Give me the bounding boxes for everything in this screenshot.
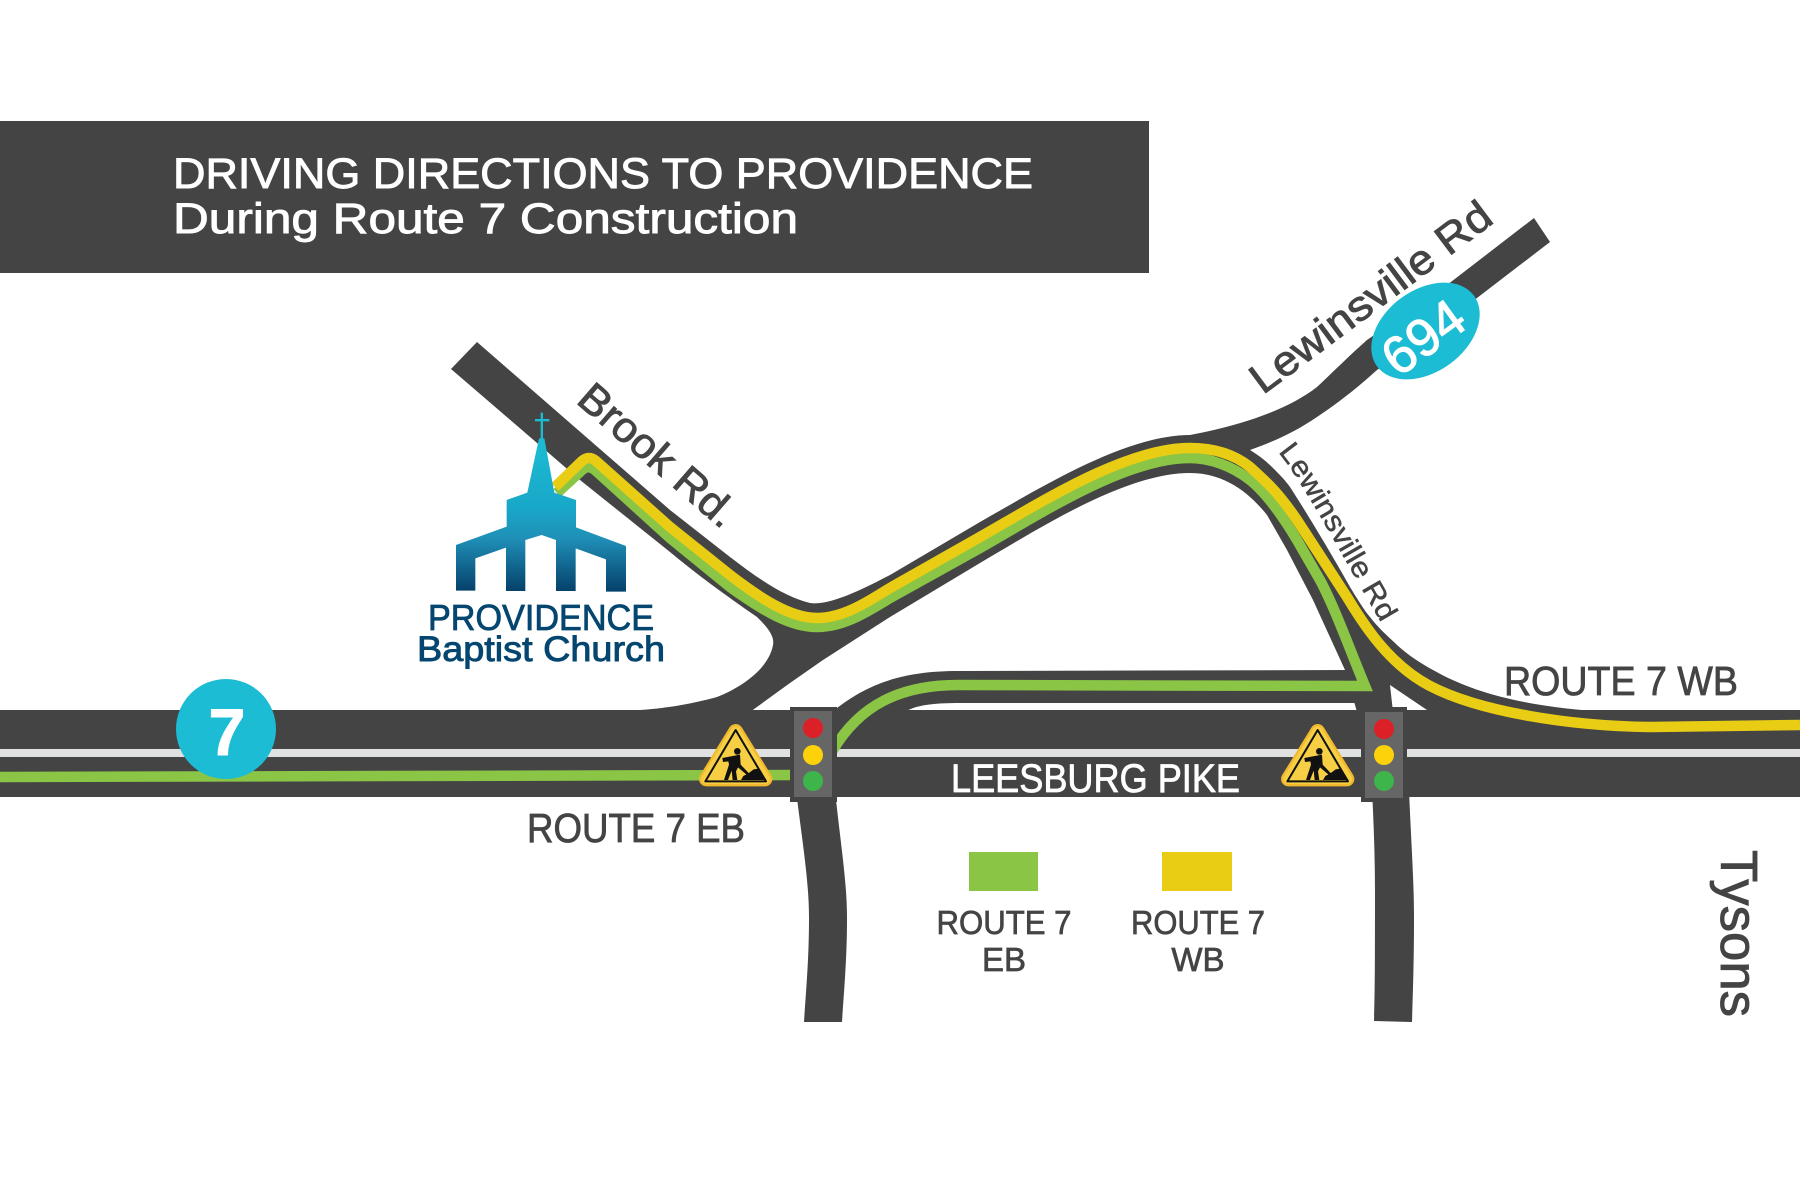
- median line: [0, 749, 1800, 757]
- road: south leg left: [796, 790, 847, 1022]
- label: Brook Rd: Brook Rd.: [569, 373, 747, 537]
- Route 694 shield: 694: [1371, 288, 1477, 388]
- church logo: [417, 413, 665, 669]
- icon: church: [456, 413, 626, 592]
- road: service road: [832, 670, 1362, 712]
- label: Tysons: Tysons: [1709, 850, 1767, 1017]
- legend: [936, 852, 1265, 978]
- legend label: WB: WB: [1171, 941, 1225, 978]
- church subtitle: Baptist Church: [417, 630, 665, 669]
- label: Leesburg Pike: LEESBURG PIKE: [951, 757, 1240, 801]
- label: Route 7 EB: ROUTE 7 EB: [527, 805, 745, 851]
- icon: construction sign right: [1287, 730, 1348, 781]
- title line 1: DRIVING DIRECTIONS TO PROVIDENCE: [173, 150, 1033, 198]
- legend swatch: EB: [969, 852, 1038, 891]
- label: Lewinsville Rd lower: Lewinsville Rd: [1279, 441, 1399, 622]
- road network: [0, 218, 1800, 1022]
- church name: PROVIDENCE: [428, 597, 654, 638]
- route: Route 7 WB yellow: [555, 448, 1800, 727]
- Route 7 shield: 7: [209, 695, 245, 769]
- legend swatch: WB: [1162, 852, 1232, 891]
- Route 694 shield: [1353, 263, 1498, 399]
- legend label: EB: EB: [982, 941, 1026, 978]
- icon: construction sign left: [705, 730, 766, 781]
- legend label: EB: ROUTE 7: [936, 904, 1072, 941]
- Route 7 shield: [176, 679, 276, 779]
- title banner: [0, 121, 1149, 273]
- traffic light right: [1361, 707, 1407, 802]
- traffic light left: [790, 707, 837, 802]
- legend label: WB: ROUTE 7: [1131, 904, 1265, 941]
- road: Brook Rd, Lewinsville Rd and Route 7 WB ramp: [451, 218, 1610, 712]
- route: Route 7 EB green: [0, 458, 1365, 777]
- title line 2: During Route 7 Construction: [173, 195, 798, 243]
- label: Route 7 WB: ROUTE 7 WB: [1504, 658, 1738, 704]
- road: Leesburg Pike: [0, 710, 1800, 797]
- road: south leg right: [1372, 790, 1414, 1022]
- label: Lewinsville Rd upper: Lewinsville Rd: [1248, 198, 1494, 394]
